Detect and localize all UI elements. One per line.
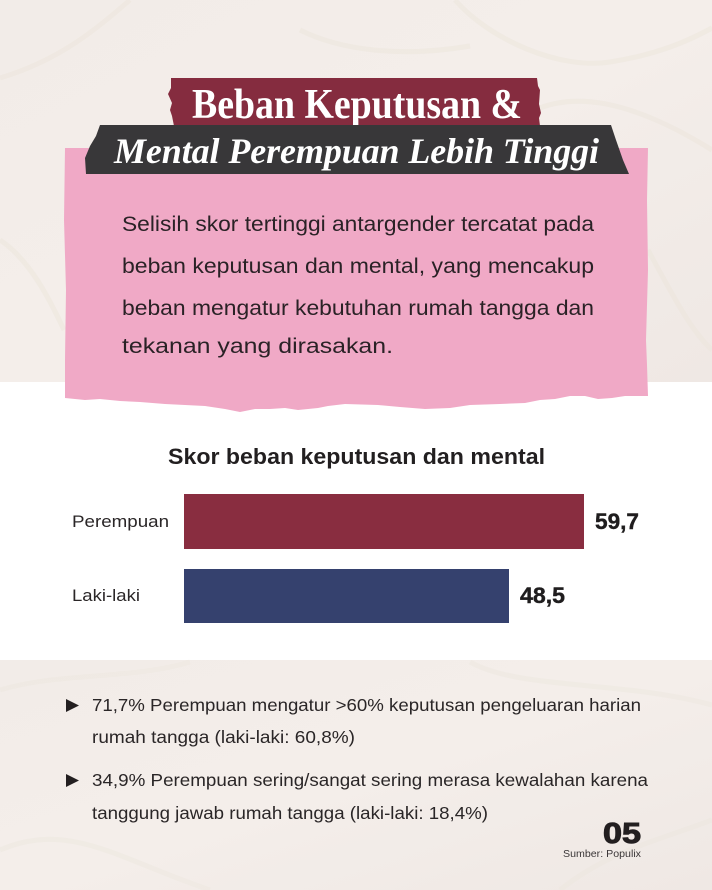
source note: Sumber: Populix [563, 848, 642, 860]
bullet list [66, 695, 648, 823]
bar: Laki-laki: Laki-laki [72, 586, 140, 605]
intro text block: Selisih skor tertinggi antargender tercatat pada [122, 213, 594, 236]
panel: pink torn paper [64, 148, 648, 412]
chart heading: Skor beban keputusan dan mental [168, 444, 545, 469]
title line 2: Mental Perempuan Lebih Tinggi [113, 131, 599, 171]
bullet 1: 71,7% Perempuan mengatur >60% keputusan pengeluaran harian [92, 695, 641, 715]
background: white chart band [0, 382, 712, 660]
bar: Laki-laki [72, 569, 565, 623]
bar: Perempuan: 59,7 [595, 509, 639, 534]
bar: Perempuan: Perempuan [72, 512, 169, 531]
page number: 05 [603, 818, 641, 850]
background: top marble panel [0, 0, 712, 382]
bar: Perempuan [72, 494, 639, 549]
intro text block: beban mengatur kebutuhan rumah tangga dan [122, 297, 594, 320]
bullet 2: tanggung jawab rumah tangga (laki-laki: 18,4%) [92, 803, 488, 823]
intro text block [122, 213, 594, 358]
bullet 1 [66, 695, 641, 747]
bullet 2: 34,9% Perempuan sering/sangat sering merasa kewalahan karena [92, 770, 648, 790]
bar chart [72, 494, 639, 623]
title line 1: Beban Keputusan & [192, 82, 522, 128]
bar: Laki-laki: 48,5 [520, 583, 565, 608]
title banner: maroon [168, 78, 541, 128]
background: bottom marble panel [0, 660, 712, 890]
title banner: dark [85, 125, 629, 174]
intro text block: beban keputusan dan mental, yang mencakup [122, 255, 594, 278]
intro text block: tekanan yang dirasakan. [122, 335, 393, 358]
bullet 1: rumah tangga (laki-laki: 60,8%) [92, 727, 355, 747]
bullet 2 [66, 770, 648, 823]
